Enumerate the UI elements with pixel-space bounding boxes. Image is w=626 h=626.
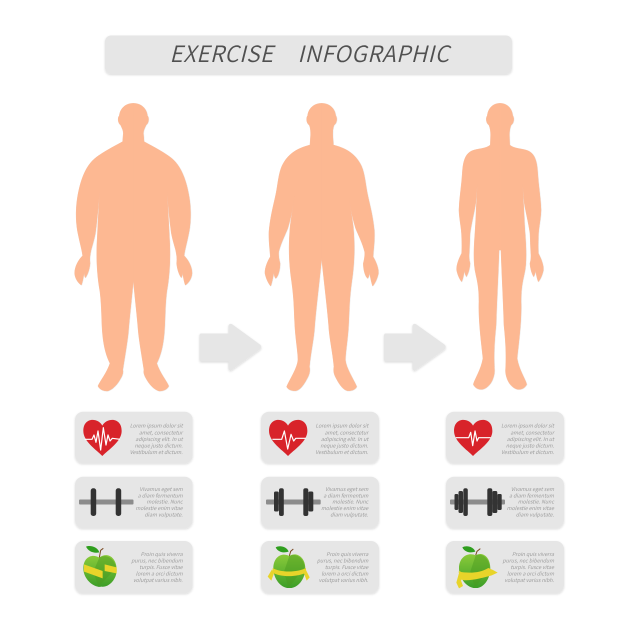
text: dumbbell stage 3: Vivamus eget sem <box>511 486 554 493</box>
text: heart stage 2: amet, consectetur <box>325 429 369 436</box>
text: heart stage 1: amet, consectetur <box>139 429 184 436</box>
text: dumbbell stage 3: molestie. Nunc <box>518 499 555 506</box>
text: dumbbell stage 2: molestie enim vitae <box>321 505 369 512</box>
text: dumbbell stage 2: diam vulputate. <box>330 512 369 519</box>
text: dumbbell stage 1: a diam fermentum <box>138 492 183 499</box>
text: heart stage 1: Lorem ipsum dolor sit <box>130 423 184 430</box>
text: apple stage 3: turpis. Fusce vitae <box>511 564 555 571</box>
panel: dumbbell stage 1 <box>75 477 193 528</box>
text: dumbbell stage 2: molestie. Nunc <box>332 499 370 506</box>
text: apple stage 3: lorem a orci dictum <box>507 571 554 578</box>
text: apple stage 1: lorem a orci dictum <box>136 571 183 578</box>
text: heart stage 2: adipiscing elit. In ut <box>321 436 369 443</box>
title: INFOGRAPHIC <box>298 37 452 69</box>
text: apple stage 2: volutpat varius nibh. <box>319 577 369 584</box>
text: apple stage 2: Proin quis viverra <box>326 551 369 558</box>
text: dumbbell stage 3: molestie enim vitae <box>507 505 555 512</box>
text: heart stage 1: Vestibulum et dictum. <box>130 449 183 456</box>
text: dumbbell stage 3: diam vulputate. <box>516 512 555 519</box>
text: apple stage 2: turpis. Fusce vitae <box>325 564 369 571</box>
text: dumbbell stage 2: a diam fermentum <box>323 492 368 499</box>
icon: heart with medium pulse <box>269 420 307 456</box>
panel: heart stage 1 <box>75 412 193 463</box>
title: EXERCISE <box>170 37 276 69</box>
icon: apple with tight tape <box>456 546 498 588</box>
text: dumbbell stage 1: diam vulputate. <box>145 512 183 519</box>
text: dumbbell stage 2: Vivamus eget sem <box>325 486 368 493</box>
text: heart stage 2: Vestibulum et dictum. <box>315 449 369 456</box>
text: heart stage 3: Vestibulum et dictum. <box>501 449 555 456</box>
text: heart stage 3: Lorem ipsum dolor sit <box>501 423 555 430</box>
text: heart stage 2: Lorem ipsum dolor sit <box>315 423 369 430</box>
text: heart stage 3: adipiscing elit. In ut <box>507 436 555 443</box>
text: heart stage 1: adipiscing elit. In ut <box>135 436 184 443</box>
panel: heart stage 3 <box>446 412 564 463</box>
icon: light dumbbell <box>79 488 134 516</box>
arrow: first to second <box>200 324 261 370</box>
icon: heart with calm pulse <box>454 420 492 456</box>
arrow: second to third <box>384 324 446 370</box>
text: apple stage 2: purus, nec bibendum <box>317 558 368 565</box>
panel: apple stage 1 <box>75 541 193 593</box>
panel: apple stage 3 <box>446 541 564 593</box>
text: heart stage 2: neque justo dictum. <box>320 442 369 449</box>
text: apple stage 3: volutpat varius nibh. <box>504 577 555 584</box>
text: dumbbell stage 3: a diam fermentum <box>509 492 554 499</box>
icon: apple with loose tape <box>83 546 117 587</box>
panel: dumbbell stage 2 <box>261 477 379 528</box>
text: apple stage 1: Proin quis viverra <box>141 551 184 558</box>
text: heart stage 1: neque justo dictum. <box>135 442 183 449</box>
figure: fit body <box>457 103 543 389</box>
icon: heart with busy pulse <box>83 420 122 456</box>
text: dumbbell stage 1: Vivamus eget sem <box>140 486 183 493</box>
icon: apple with tape at waist <box>268 546 310 588</box>
text: apple stage 3: Proin quis viverra <box>512 551 555 558</box>
text: heart stage 3: neque justo dictum. <box>506 442 555 449</box>
panel: dumbbell stage 3 <box>446 477 564 528</box>
text: apple stage 3: purus, nec bibendum <box>503 558 554 565</box>
text: dumbbell stage 1: molestie. Nunc <box>147 499 184 506</box>
text: apple stage 1: volutpat varius nibh. <box>133 577 183 584</box>
text: apple stage 2: lorem a orci dictum <box>321 571 368 578</box>
icon: heavy dumbbell <box>450 488 505 516</box>
text: dumbbell stage 1: molestie enim vitae <box>135 505 184 512</box>
text: apple stage 1: turpis. Fusce vitae <box>139 564 184 571</box>
text: heart stage 3: amet, consectetur <box>510 429 555 436</box>
figure: medium body <box>265 103 378 391</box>
title bar <box>105 36 512 74</box>
panel: heart stage 2 <box>261 412 379 463</box>
text: apple stage 1: purus, nec bibendum <box>131 558 183 565</box>
icon: medium dumbbell <box>266 488 321 516</box>
panel: apple stage 2 <box>261 541 379 593</box>
figure: overweight body <box>75 103 192 391</box>
